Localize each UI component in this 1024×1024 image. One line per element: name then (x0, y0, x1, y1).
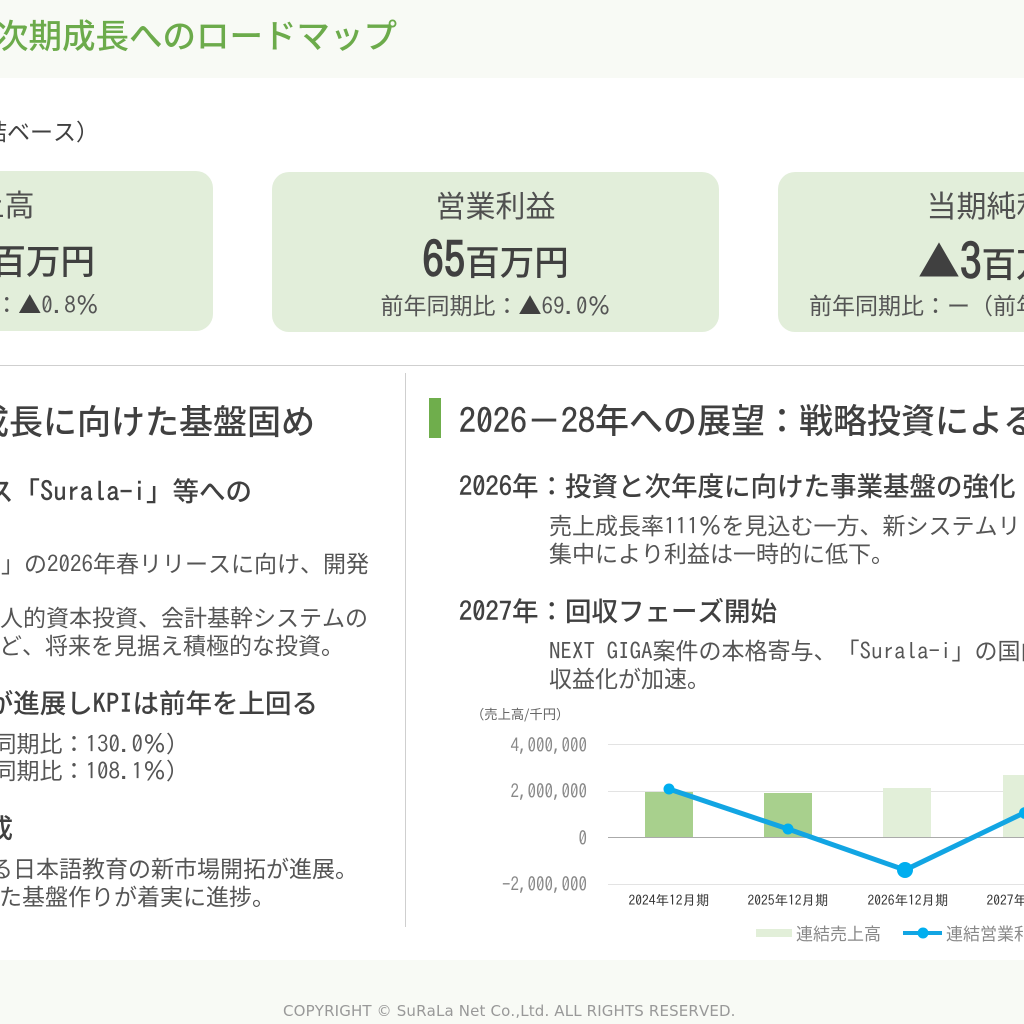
operating profit value: 65 (422, 235, 465, 284)
left item 1 body line 1: 」の2026年春リリースに向け、開発 (1, 544, 369, 578)
sales bars (645, 775, 1024, 837)
header band (0, 0, 1024, 78)
heading accent bar (429, 398, 441, 438)
x axis labels: 2026年12月期 (868, 893, 948, 907)
y axis labels: 0 (578, 829, 587, 848)
2026 body line 2: 集中により利益は一時的に低下。 (549, 534, 894, 568)
card: net income (778, 172, 1024, 332)
title: 次期成長へのロードマップ (0, 9, 397, 58)
2027 body line 2: 収益化が加速。 (549, 660, 710, 694)
footer band (0, 960, 1024, 1024)
chart legend: 連結売上高 (796, 920, 881, 945)
y axis labels (502, 736, 587, 894)
x axis labels: 2025年12月期 (748, 893, 828, 907)
x axis labels (628, 893, 1024, 907)
card: operating profit (272, 172, 719, 332)
chart legend (756, 920, 1024, 945)
y axis labels: -2,000,000 (502, 875, 587, 894)
copyright: COPYRIGHT © SuRaLa Net Co.,Ltd. ALL RIGHTS RESERVED. (283, 1002, 736, 1020)
operating profit value: 百万円 (465, 235, 569, 285)
2027 heading: 2027年：回収フェーズ開始 (459, 590, 777, 628)
left item 3 body line 1: る日本語教育の新市場開拓が進展。 (0, 850, 358, 884)
y axis labels: 4,000,000 (511, 736, 587, 755)
chart unit label: （売上高/千円） (471, 704, 569, 723)
2026 heading: 2026年：投資と次年度に向けた事業基盤の強化 (459, 464, 1016, 504)
x axis labels: 2024年12月期 (628, 893, 710, 907)
card: net sales (0, 171, 213, 331)
operating profit comparison: 前年同期比：▲69.0％ (380, 287, 610, 321)
operating profit label: 営業利益 (436, 182, 556, 226)
net income value: 3 (960, 237, 982, 286)
operating profit line (664, 784, 1024, 878)
y axis labels: 2,000,000 (511, 782, 587, 801)
